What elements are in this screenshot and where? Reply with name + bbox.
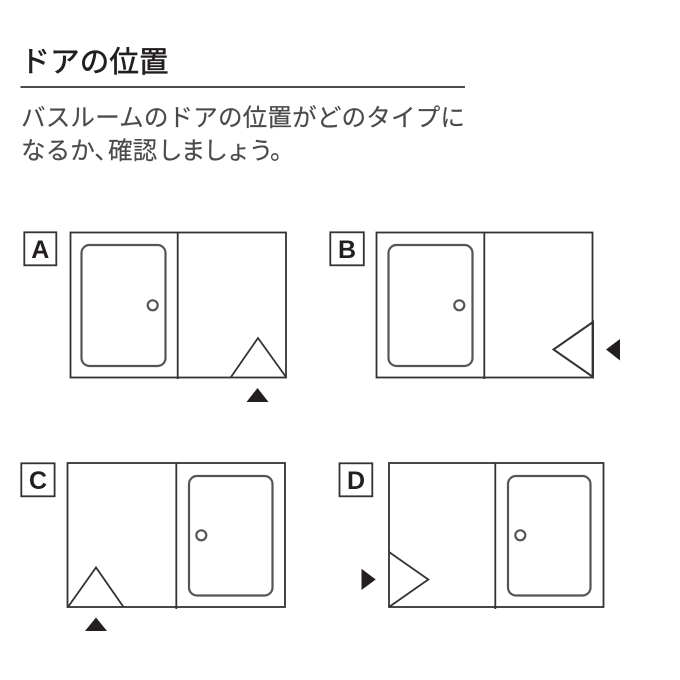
room outline D: [389, 463, 604, 607]
label C: [21, 463, 55, 496]
panel: type C: [21, 463, 285, 631]
door swing D: [389, 552, 428, 607]
room outline B: [376, 232, 592, 378]
arrow C: [85, 618, 107, 631]
bathtub door B: [388, 245, 472, 366]
label D: [340, 463, 372, 496]
bathtub door A: [82, 245, 166, 366]
label B: B: [338, 236, 356, 264]
title: ドアの位置: [20, 46, 168, 79]
intro text: 確認: [108, 137, 157, 165]
bathtub door C: [189, 476, 272, 596]
arrow B: [606, 339, 620, 360]
label A: A: [31, 236, 49, 264]
panel: type D: [340, 463, 604, 609]
room outline C: [68, 463, 285, 607]
intro text: しましょう。: [158, 138, 293, 165]
door swing A: [231, 338, 286, 377]
label A: [24, 232, 56, 265]
arrow D: [362, 569, 376, 590]
door swing B: [554, 322, 593, 377]
bathtub door D: [508, 476, 590, 596]
intro text: バスルームのドアの位置がどのタイプに: [21, 104, 465, 132]
panel: type B: [330, 232, 620, 379]
panel: type A: [24, 232, 286, 402]
label C: C: [29, 467, 47, 495]
label D: D: [347, 467, 365, 495]
room outline A: [70, 232, 286, 378]
intro text: なるか、: [21, 138, 119, 165]
door swing C: [68, 568, 124, 607]
label B: [330, 232, 364, 265]
arrow A: [246, 388, 268, 402]
